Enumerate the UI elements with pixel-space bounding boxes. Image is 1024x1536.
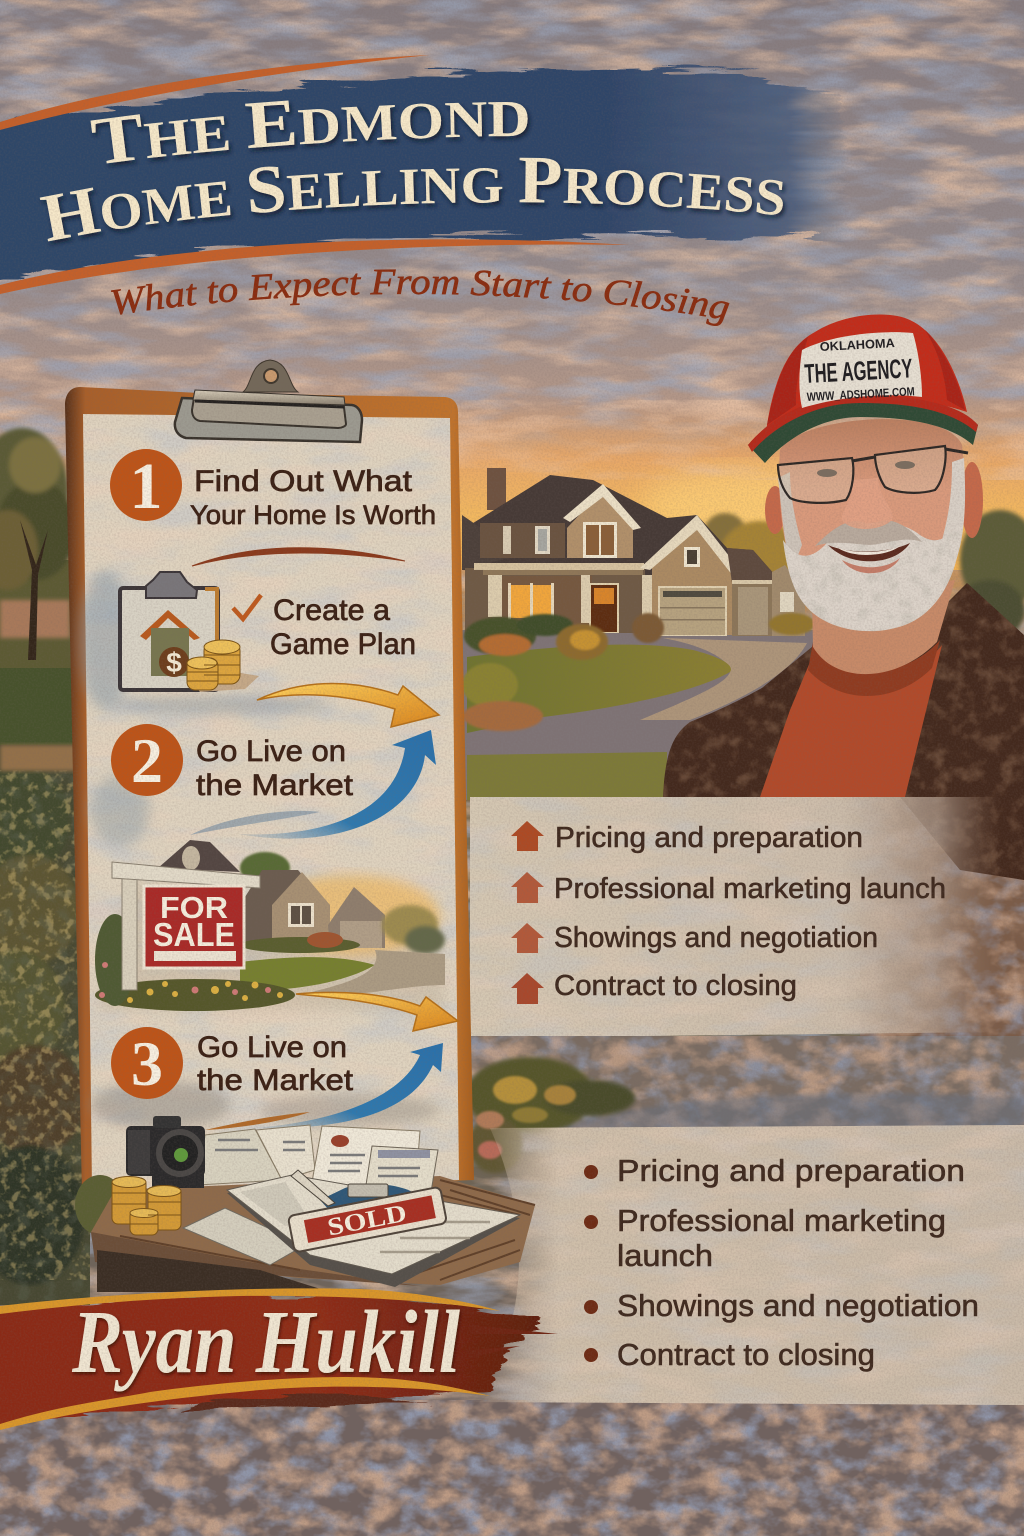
ribbon lower gold stroke bbox=[0, 1377, 490, 1430]
beard bbox=[783, 523, 960, 631]
nose bbox=[842, 478, 893, 529]
sign post bbox=[122, 878, 137, 990]
overview item 2: launch bbox=[617, 1238, 713, 1273]
clipboard board bbox=[65, 387, 474, 1195]
step heading: create a game plan: Create a bbox=[273, 594, 390, 627]
swoosh divider bbox=[192, 548, 405, 566]
eyes bbox=[817, 461, 915, 477]
overview item 1: Pricing and preparation bbox=[617, 1153, 965, 1188]
badge text: oklahoma: OKLAHOMA bbox=[819, 336, 895, 354]
portrait: agent in red cap bbox=[663, 314, 1024, 880]
garden flowers under table bbox=[75, 1175, 125, 1235]
overview item 3: Showings and negotiation bbox=[617, 1288, 979, 1323]
icon: house bullet 3 bbox=[511, 923, 544, 953]
title line 2: HOME SELLING PROCESS bbox=[40, 158, 788, 246]
clipboard bbox=[65, 360, 474, 1195]
overview item 4: Contract to closing bbox=[617, 1337, 875, 1372]
signature ribbon bbox=[0, 1288, 558, 1430]
panel: key steps list bbox=[470, 797, 1000, 1038]
cap brim bbox=[748, 397, 978, 463]
step 3 badge: 3 bbox=[131, 1028, 163, 1099]
sold sign bbox=[288, 1187, 447, 1253]
ribbon top gold stroke bbox=[0, 1288, 500, 1314]
step 2 heading bbox=[196, 735, 354, 802]
arrow: orange upper bbox=[257, 684, 439, 727]
banner upper stroke bbox=[0, 55, 430, 130]
icon: clipboard clip bbox=[175, 360, 362, 442]
list item 4: Contract to closing bbox=[554, 970, 797, 1002]
glasses bbox=[778, 446, 968, 503]
landscape: middle garden strip bbox=[465, 1036, 1024, 1173]
step 1 heading: Find Out What bbox=[194, 465, 413, 498]
step heading: create a game plan bbox=[270, 594, 416, 661]
background trees bbox=[703, 510, 1024, 640]
magazine left bbox=[183, 1208, 305, 1265]
step 3 heading: the Market bbox=[197, 1064, 354, 1097]
icon: house bullet 2 bbox=[511, 872, 544, 903]
step 3 heading bbox=[197, 1031, 354, 1097]
bullet 4 bbox=[584, 1348, 598, 1362]
icon: house bullet 1 bbox=[511, 821, 544, 851]
sold label: SOLD bbox=[325, 1200, 409, 1242]
landscape: left trees and garden bbox=[0, 428, 90, 1305]
title line 1: THE EDMOND bbox=[90, 100, 532, 168]
subtitle: What to Expect From Start to Closing bbox=[111, 269, 730, 326]
step 2 heading: Go Live on bbox=[196, 735, 346, 768]
for sale sign: SALE bbox=[153, 916, 235, 953]
step 3 heading: Go Live on bbox=[197, 1031, 347, 1064]
arrow: blue lower bbox=[255, 1043, 443, 1128]
lower mottled stone texture bbox=[0, 1400, 1024, 1536]
shirt bbox=[760, 645, 942, 797]
wooden table bbox=[91, 1176, 535, 1292]
step 2 heading: the Market bbox=[196, 769, 354, 802]
face bbox=[779, 419, 965, 619]
icon: plan clipboard with house and coins: $ bbox=[166, 647, 182, 678]
icon: plan clipboard with house and coins bbox=[120, 572, 259, 692]
step 2 badge: 2 bbox=[131, 725, 163, 796]
table with documents, camera and sold sign bbox=[75, 1116, 535, 1292]
step 1 badge: 1 bbox=[130, 450, 162, 523]
pen and folder bbox=[291, 1170, 420, 1222]
arrow: blue upper bbox=[238, 730, 436, 839]
badge text: the agency: THE AGENCY bbox=[804, 353, 913, 389]
list item 2: Professional marketing launch bbox=[554, 873, 946, 905]
step 1 badge bbox=[110, 449, 182, 523]
list item 1: Pricing and preparation bbox=[555, 822, 863, 854]
jacket bbox=[663, 583, 1024, 880]
step 3 badge bbox=[111, 1027, 183, 1099]
icon: check mark bbox=[233, 595, 261, 619]
arrow: orange lower bbox=[296, 992, 458, 1031]
cap crown bbox=[767, 314, 967, 440]
banner lower stroke bbox=[0, 239, 630, 294]
driveway and ground bbox=[462, 630, 813, 800]
bullet 2 bbox=[584, 1215, 598, 1229]
open magazine stack bbox=[227, 1175, 520, 1287]
back papers bbox=[198, 1125, 438, 1198]
neck and ears bbox=[812, 580, 955, 674]
step 1 heading: Your Home Is Worth bbox=[190, 500, 436, 530]
panel: process overview bullets bbox=[470, 1125, 1024, 1405]
list item 3: Showings and negotiation bbox=[554, 922, 878, 954]
title banner bbox=[0, 55, 848, 294]
step 1 heading bbox=[190, 465, 436, 530]
scene: for sale house bbox=[95, 840, 445, 1011]
shrubs bbox=[462, 613, 815, 731]
mouth bbox=[828, 543, 910, 573]
overview item 2: Professional marketing bbox=[617, 1203, 946, 1238]
ribbon brush tips bbox=[440, 1305, 558, 1358]
hair sideburns bbox=[778, 458, 965, 570]
clipboard paper bbox=[83, 414, 459, 1190]
bullet 1 bbox=[584, 1165, 598, 1179]
icon: house bullet 4 bbox=[511, 973, 544, 1004]
house bbox=[462, 468, 805, 636]
for sale sign bbox=[144, 886, 244, 968]
for sale sign: FOR bbox=[160, 890, 228, 925]
icon: coin stacks bbox=[112, 1176, 181, 1235]
bullet 3 bbox=[584, 1300, 598, 1314]
step 2 badge bbox=[111, 724, 183, 796]
cap badge bbox=[799, 332, 922, 408]
badge text: url: WWW_ADSHOME.COM bbox=[806, 384, 915, 404]
step heading: create a game plan: Game Plan bbox=[270, 628, 416, 661]
garden flower clusters bbox=[476, 1076, 576, 1159]
icon: camera bbox=[126, 1116, 205, 1188]
landscape: house, lawn and driveway bbox=[460, 468, 1024, 800]
signature name: Ryan Hukill bbox=[71, 1293, 460, 1392]
